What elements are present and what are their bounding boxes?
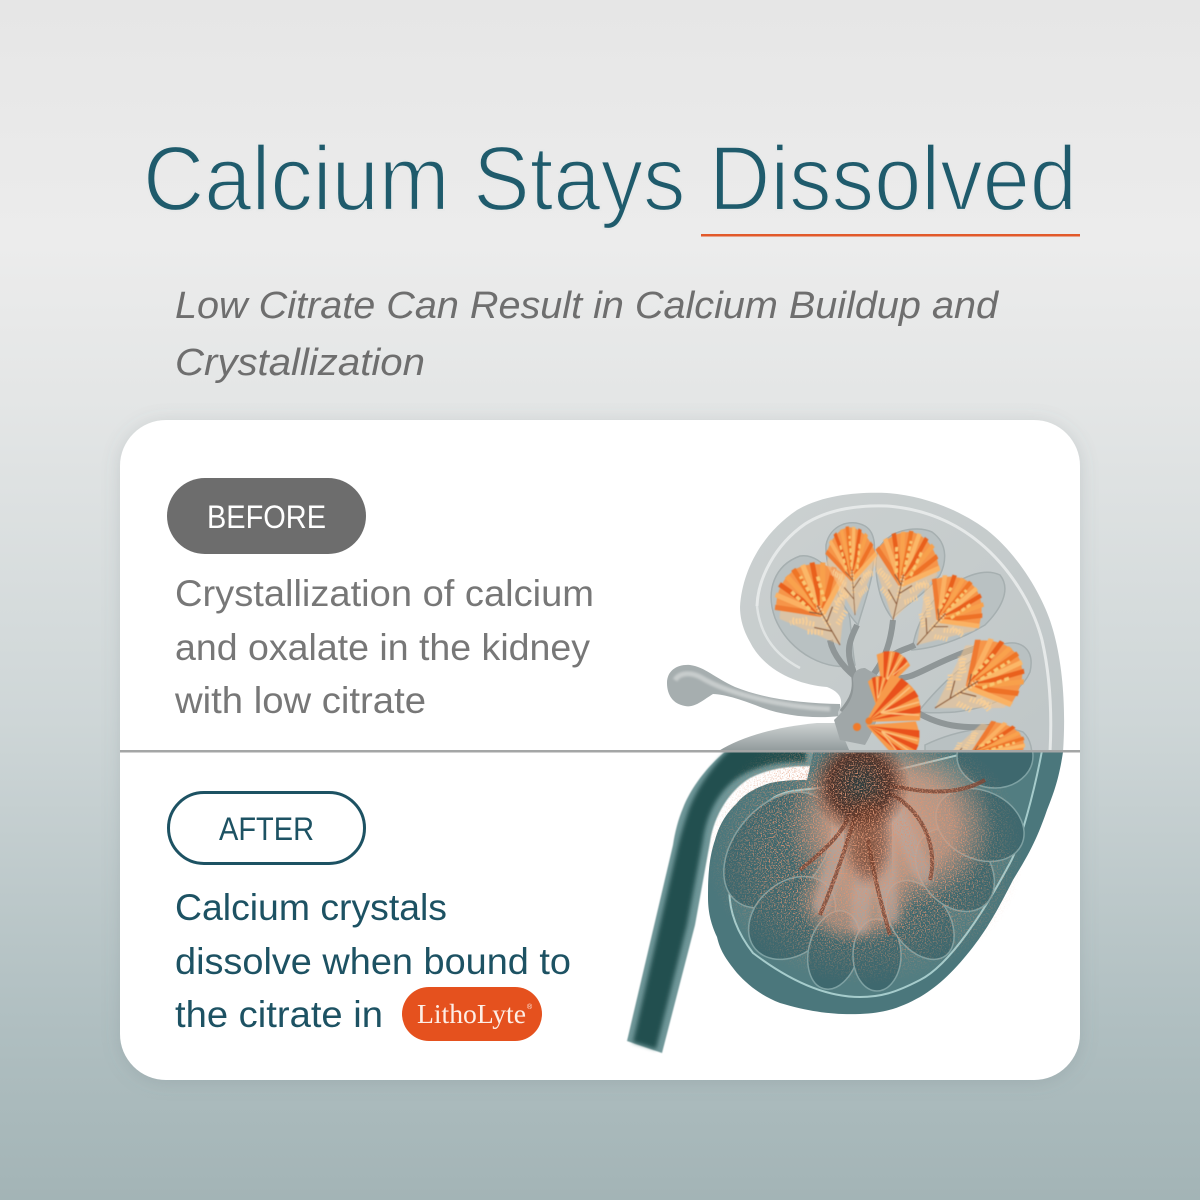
title underline	[701, 234, 1080, 236]
kidney illustration: after half	[626, 752, 1063, 1054]
lobes	[723, 752, 1034, 992]
LithoLyte brand badge	[402, 987, 542, 1041]
crystal fans	[774, 526, 1026, 750]
before description: Crystallization of calcium	[175, 573, 594, 614]
LithoLyte brand badge: ®	[527, 1003, 533, 1011]
after badge: AFTER	[219, 811, 314, 847]
after description: the citrate in	[175, 994, 383, 1035]
before description	[174, 573, 594, 721]
before badge: BEFORE	[207, 499, 326, 535]
dissolving particle glow	[710, 752, 1020, 982]
before description: and oxalate in the kidney	[175, 627, 590, 668]
LithoLyte brand badge: LithoLyte	[417, 999, 526, 1029]
divider	[120, 750, 1080, 752]
subtitle: Crystallization	[175, 342, 425, 384]
after description: dissolve when bound to	[175, 941, 571, 982]
after description: Calcium crystals	[175, 887, 447, 928]
title: Calcium Stays Dissolved	[143, 128, 1077, 230]
kidney body rim	[708, 745, 1064, 1014]
after badge	[168, 792, 364, 864]
kidney body	[740, 493, 1064, 752]
ureter stub	[667, 665, 840, 717]
kidney illustration: before half	[667, 492, 1064, 750]
after description	[175, 887, 571, 1035]
before description: with low citrate	[174, 680, 426, 721]
lower ureter top	[720, 723, 849, 750]
ureter	[627, 745, 815, 1053]
panel: before and after card	[120, 420, 1080, 1080]
lobes	[771, 523, 1032, 760]
before badge	[167, 478, 366, 554]
subtitle: Low Citrate Can Result in Calcium Buildup and	[175, 285, 1000, 327]
collecting tree	[830, 620, 990, 727]
subtitle	[175, 285, 1000, 384]
